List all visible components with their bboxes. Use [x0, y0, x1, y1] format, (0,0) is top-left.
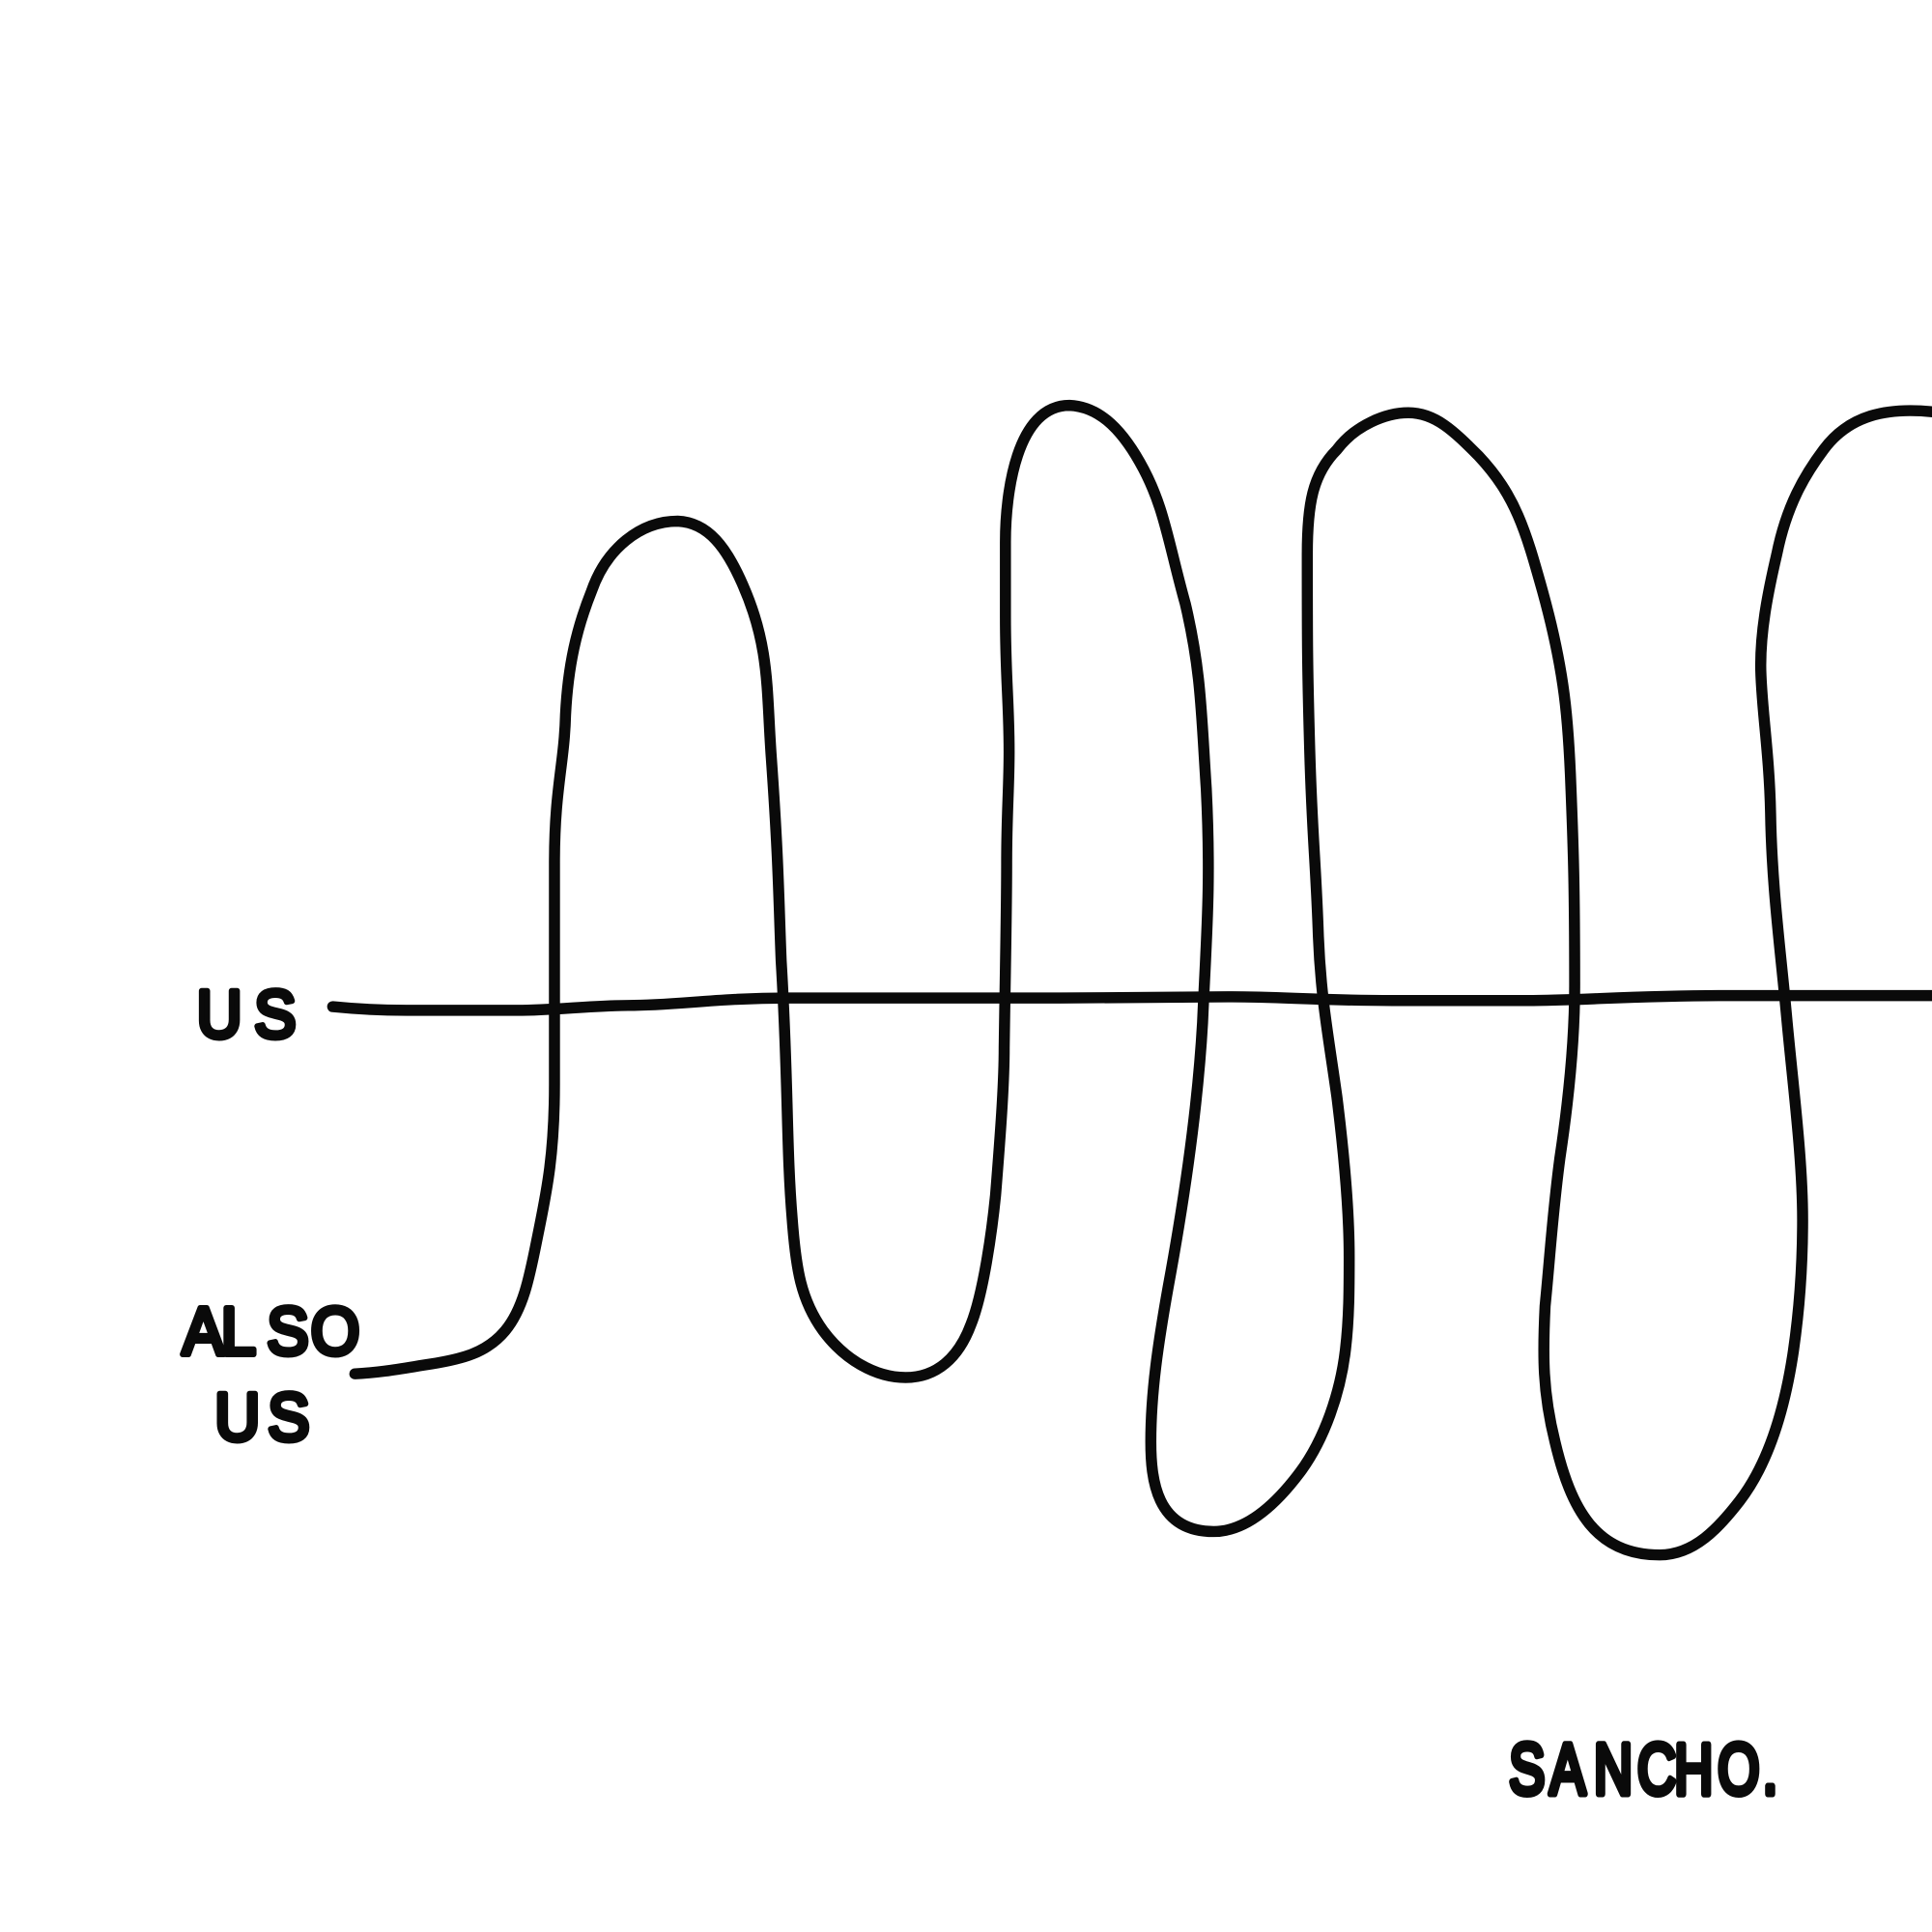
label: also: ALSO — [183, 1294, 359, 1370]
signature: sancho: SANCHO. — [1509, 1729, 1777, 1809]
straight-ish horizontal line: us — [332, 996, 1932, 1010]
label: us: US — [197, 978, 297, 1053]
label: second us: US — [214, 1380, 310, 1456]
looping scribble line: also us — [355, 406, 1932, 1555]
